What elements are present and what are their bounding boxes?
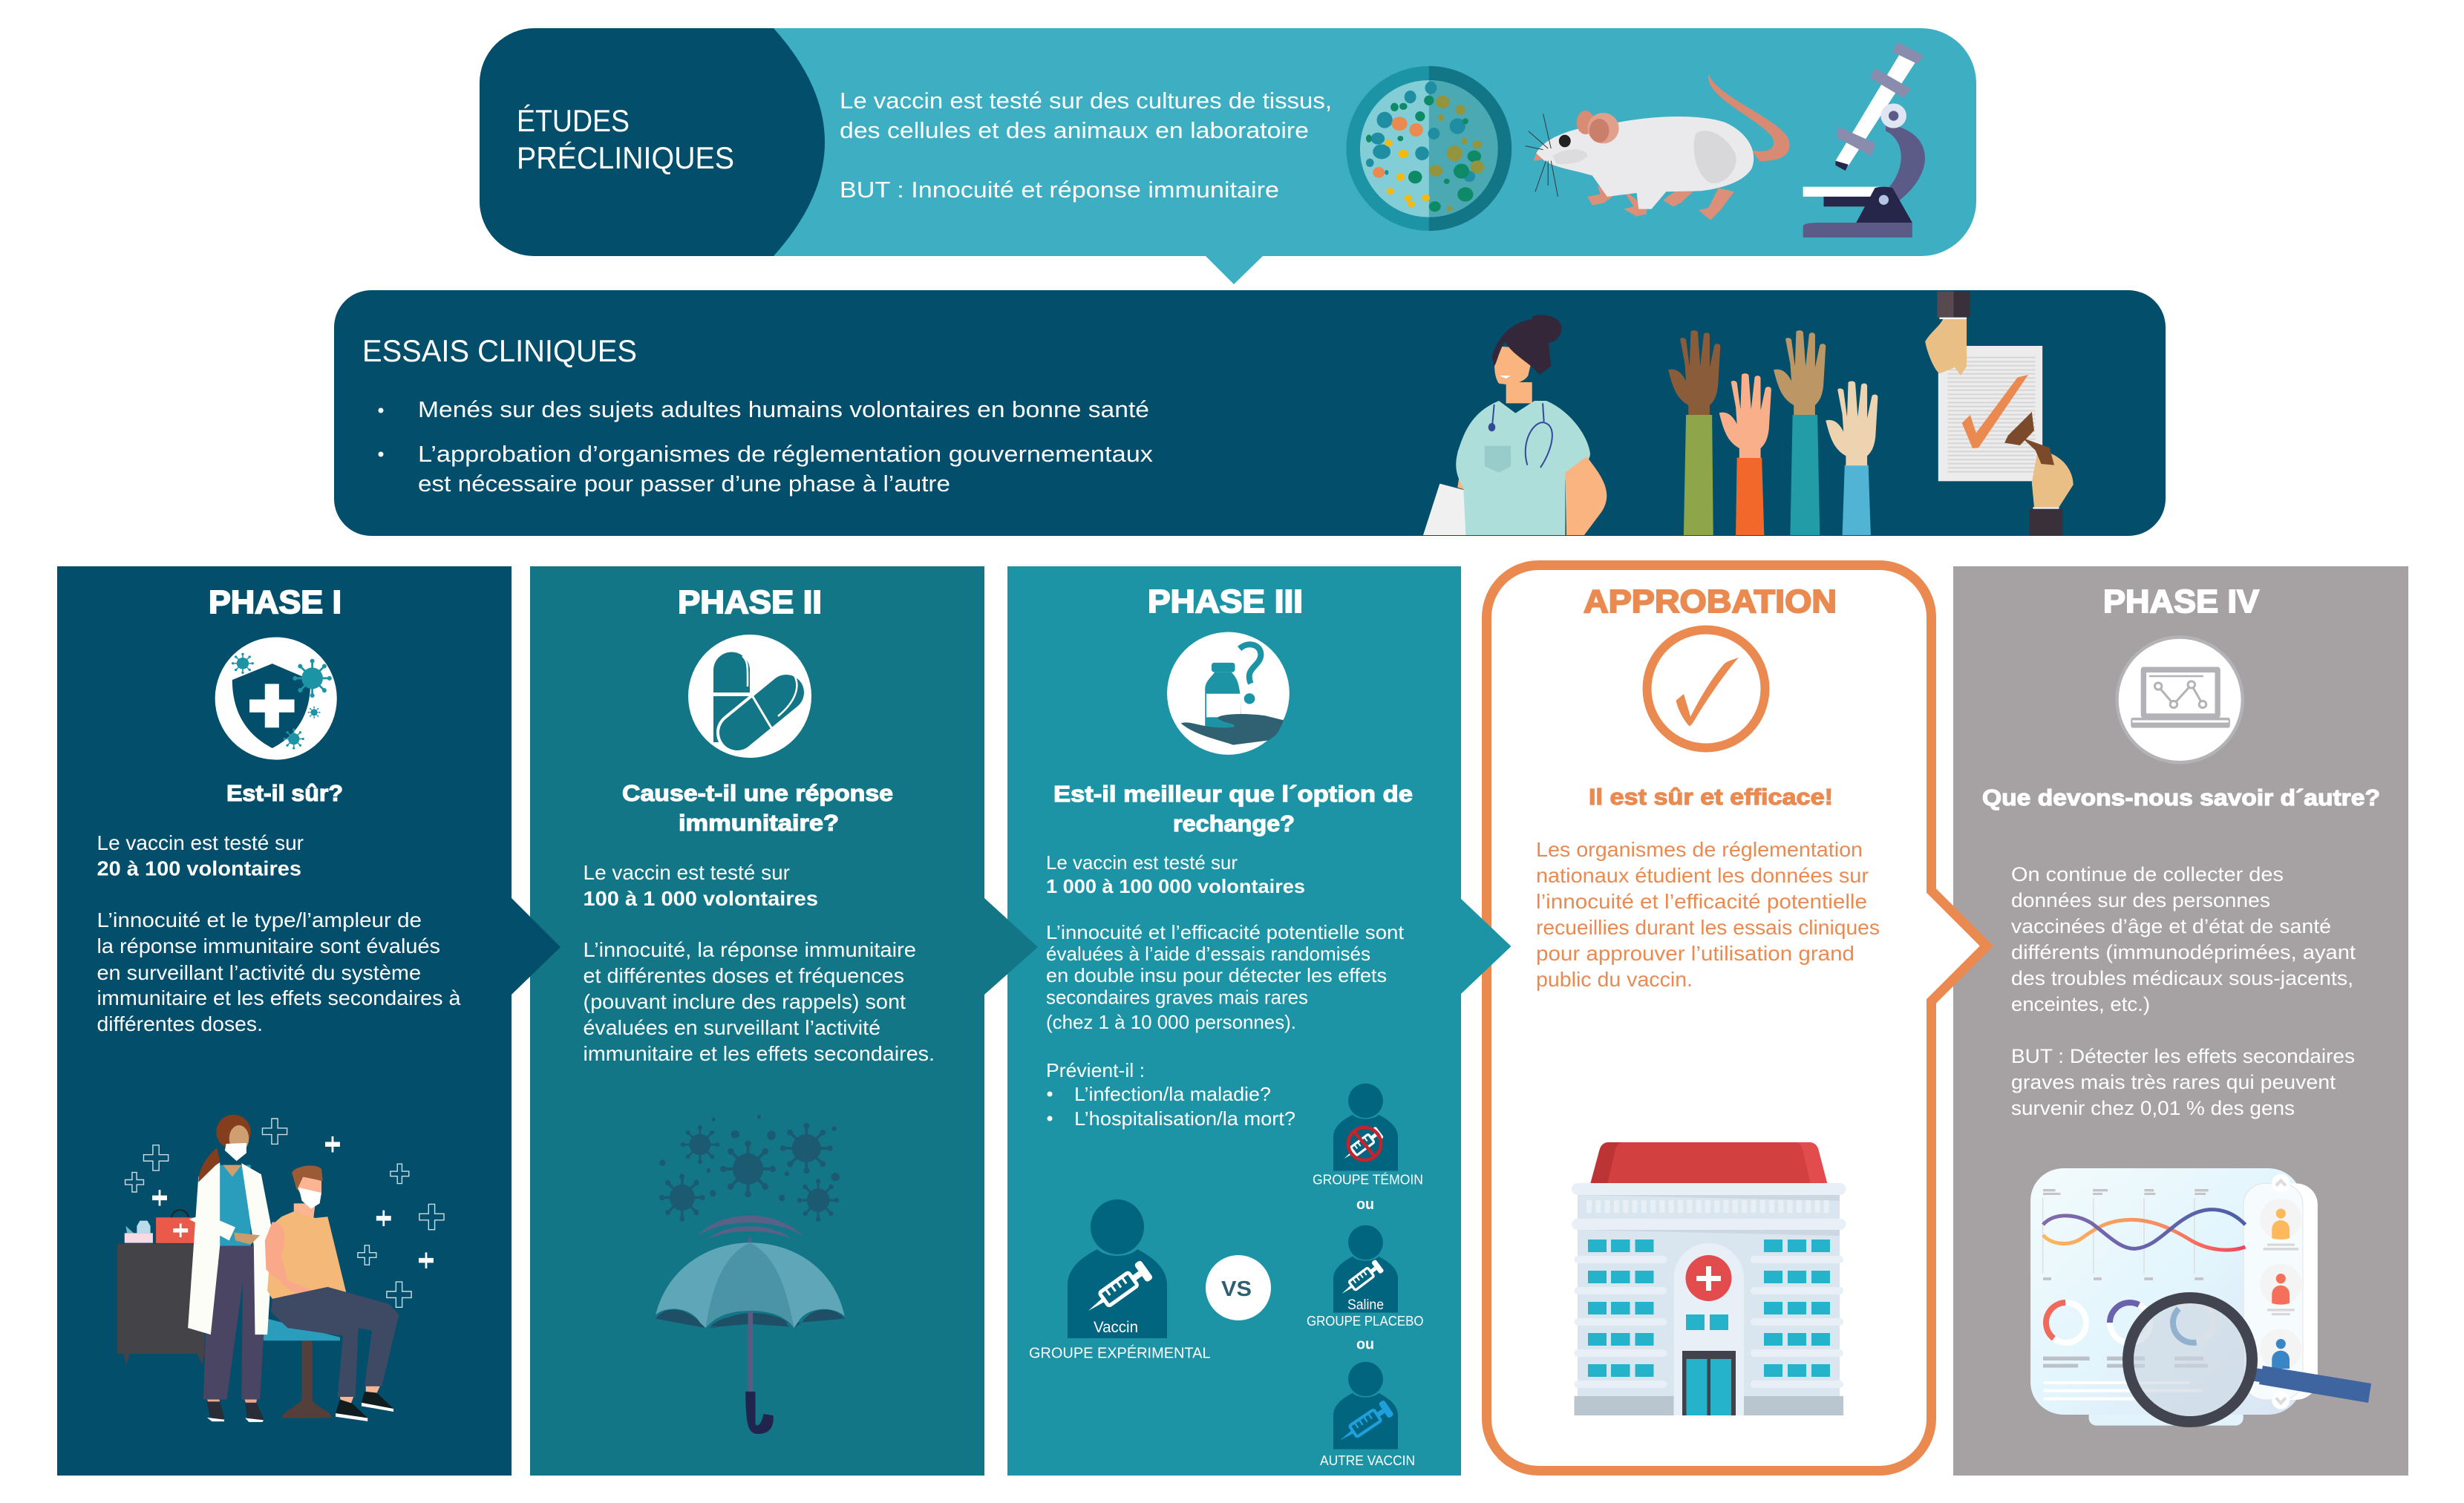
icon: raised hands: [1668, 330, 1878, 535]
question: phase II: immunitaire?: [679, 810, 839, 836]
icon: laptop chart: [2115, 635, 2244, 764]
text: phase III body: Le vaccin est testé sur: [1046, 851, 1238, 874]
text: approbation body: recueillies durant les essais cliniques: [1536, 916, 1880, 939]
text: approbation body: nationaux étudient les données sur: [1536, 864, 1869, 887]
icon: approved document with stamp: [1925, 291, 2074, 536]
icon: capsules: [688, 635, 811, 758]
text: approbation body: pour approuver l’utilisation grand: [1536, 942, 1854, 965]
text: bullets essais cliniques: Menés sur des sujets adultes humains volontaires en bonne santé: [418, 396, 1149, 422]
question: phase IV: Que devons-nous savoir d´autre?: [1982, 785, 2380, 811]
group: groupe placebo: [1307, 1225, 1424, 1329]
illustration: umbrella under viruses: [656, 1115, 845, 1434]
text: phase II body: (pouvant inclure des rappels) sont: [584, 990, 906, 1013]
icon: nurse: [1423, 315, 1607, 535]
text: phase II body: et différentes doses et fréquences: [584, 964, 904, 987]
heading: phase IV: PHASE IV: [2103, 583, 2260, 620]
illustration: hospital: [1572, 1142, 1846, 1415]
text: phase I body: la réponse immunitaire sont évalués: [97, 934, 440, 957]
group: groupe expérimental: [1029, 1199, 1210, 1361]
text: approbation body: Les organismes de réglementation: [1536, 838, 1863, 861]
text: phase III body: L’hospitalisation/la mort?: [1074, 1107, 1295, 1130]
subheading: sûr et efficace: Il est sûr et efficace!: [1589, 784, 1833, 810]
heading: phase I: PHASE I: [209, 584, 342, 620]
text: phase III body: 1 000 à 100 000 volontaires: [1046, 875, 1305, 897]
question: phase I: Est-il sûr?: [226, 780, 343, 806]
group: groupe expérimental: GROUPE EXPÉRIMENTAL: [1029, 1345, 1210, 1361]
heading block: études précliniques: PRÉCLINIQUES: [517, 140, 734, 175]
question: phase II: [622, 780, 893, 836]
text: phase II body: L’innocuité, la réponse immunitaire: [584, 938, 916, 961]
text: phase IV body: des troubles médicaux sous-jacents,: [2011, 967, 2353, 989]
text: phase III body: évaluées à l’aide d’essais randomisés: [1046, 943, 1370, 965]
text: phase I body: en surveillant l’activité du système: [97, 961, 421, 984]
text: phase IV body: On continue de collecter des: [2011, 863, 2284, 885]
text: phase I body: différentes doses.: [97, 1012, 263, 1035]
group: autre vaccin: [1320, 1362, 1415, 1468]
icon: microscope: [1803, 42, 1925, 238]
heading: phase III: PHASE III: [1148, 583, 1303, 620]
group: groupe placebo: Saline: [1347, 1297, 1384, 1313]
text: description préclinique: BUT : Innocuité et réponse immunitaire: [840, 177, 1279, 203]
text: phase III body: en double insu pour détecter les effets: [1046, 964, 1387, 986]
text: description préclinique: Le vaccin est testé sur des cultures de tissus,: [840, 88, 1332, 114]
heading block: études précliniques: ÉTUDES: [517, 103, 630, 138]
question: phase II: Cause-t-il une réponse: [622, 780, 893, 806]
icon: laboratory mouse: [1526, 73, 1790, 220]
panel: études précliniques: [480, 28, 1976, 284]
text: phase IV body: survenir chez 0,01 % des gens: [2011, 1097, 2295, 1119]
text: bullets essais cliniques: L’approbation d’organismes de réglementation gouvernementaux: [418, 441, 1154, 467]
text: description préclinique: [840, 88, 1332, 203]
illustration: doctor vaccinating patient: [117, 1115, 444, 1422]
group: groupe placebo: GROUPE PLACEBO: [1307, 1314, 1424, 1329]
illustration: data dashboard with magnifier: [2030, 1168, 2371, 1426]
text: phase IV body: enceintes, etc.): [2011, 993, 2150, 1015]
heading: essais cliniques: ESSAIS CLINIQUES: [362, 333, 637, 368]
text: phase III body: secondaires graves mais rares: [1046, 986, 1308, 1008]
icon: shield with viruses: [215, 637, 337, 760]
text: phase IV body: BUT : Détecter les effets secondaires: [2011, 1045, 2355, 1067]
panel: essais cliniques: [334, 290, 2166, 536]
panel: phase IV: [1953, 566, 2408, 1476]
text: phase I body: immunitaire et les effets secondaires à: [97, 986, 461, 1009]
badge: vs: VS: [1221, 1277, 1252, 1301]
group: groupe témoin: [1313, 1084, 1423, 1188]
text: phase I body: [97, 831, 461, 1035]
heading: phase II: PHASE II: [678, 584, 822, 620]
text: phase III body: Prévient-il :: [1046, 1059, 1145, 1081]
panel: approbation: [1486, 566, 1987, 1471]
text: phase II body: évaluées en surveillant l’activité: [584, 1016, 880, 1039]
icon: check mark in circle: [1647, 629, 1765, 748]
panel: phase II: [530, 566, 1038, 1476]
text: approbation body: public du vaccin.: [1536, 968, 1693, 991]
group: groupe expérimental: Vaccin: [1094, 1319, 1138, 1336]
panel: phase I: [57, 566, 561, 1476]
text: phase III body: L’innocuité et l’efficacité potentielle sont: [1046, 921, 1405, 943]
badge: vs: [1206, 1255, 1271, 1320]
group: autre vaccin: AUTRE VACCIN: [1320, 1453, 1415, 1468]
question: phase III: rechange?: [1173, 811, 1295, 836]
text: phase I body: L’innocuité et le type/l’ampleur de: [97, 908, 422, 931]
text: phase IV body: différents (immunodéprimées, ayant: [2011, 941, 2356, 963]
text: phase II body: immunitaire et les effets secondaires.: [584, 1042, 935, 1065]
question: phase III: [1053, 781, 1413, 836]
heading block: études précliniques: [480, 28, 825, 256]
text: phase IV body: vaccinées d’âge et d’état de santé: [2011, 915, 2331, 937]
label: ou: ou: [1356, 1336, 1374, 1352]
text: phase III body: (chez 1 à 10 000 personnes).: [1046, 1011, 1296, 1033]
text: approbation body: l’innocuité et l’efficacité potentielle: [1536, 890, 1867, 913]
text: approbation body: [1536, 838, 1880, 991]
text: phase I body: Le vaccin est testé sur: [97, 831, 304, 854]
text: bullets essais cliniques: est nécessaire pour passer d’une phase à l’autre: [418, 471, 950, 497]
text: phase I body: 20 à 100 volontaires: [97, 857, 301, 880]
text: phase IV body: [2011, 863, 2356, 1119]
icon: petri dish: [1346, 66, 1512, 231]
heading: approbation: APPROBATION: [1584, 583, 1837, 620]
text: phase III body: [1046, 851, 1405, 1130]
icon: vaccine bottle in hand with question mark: [1167, 632, 1290, 755]
text: phase II body: Le vaccin est testé sur: [584, 861, 790, 884]
text: phase II body: [584, 861, 935, 1065]
text: phase II body: 100 à 1 000 volontaires: [584, 887, 818, 910]
panel: phase III: [1007, 566, 1512, 1476]
text: phase IV body: graves mais très rares qui peuvent: [2011, 1071, 2336, 1093]
text: bullets essais cliniques: [379, 396, 1154, 497]
text: description préclinique: des cellules et des animaux en laboratoire: [840, 117, 1309, 143]
text: phase III body: L’infection/la maladie?: [1074, 1083, 1271, 1105]
question: phase III: Est-il meilleur que l´option de: [1053, 781, 1413, 807]
label: ou: ou: [1356, 1196, 1374, 1213]
group: groupe témoin: GROUPE TÉMOIN: [1313, 1173, 1423, 1188]
text: phase IV body: données sur des personnes: [2011, 889, 2270, 911]
